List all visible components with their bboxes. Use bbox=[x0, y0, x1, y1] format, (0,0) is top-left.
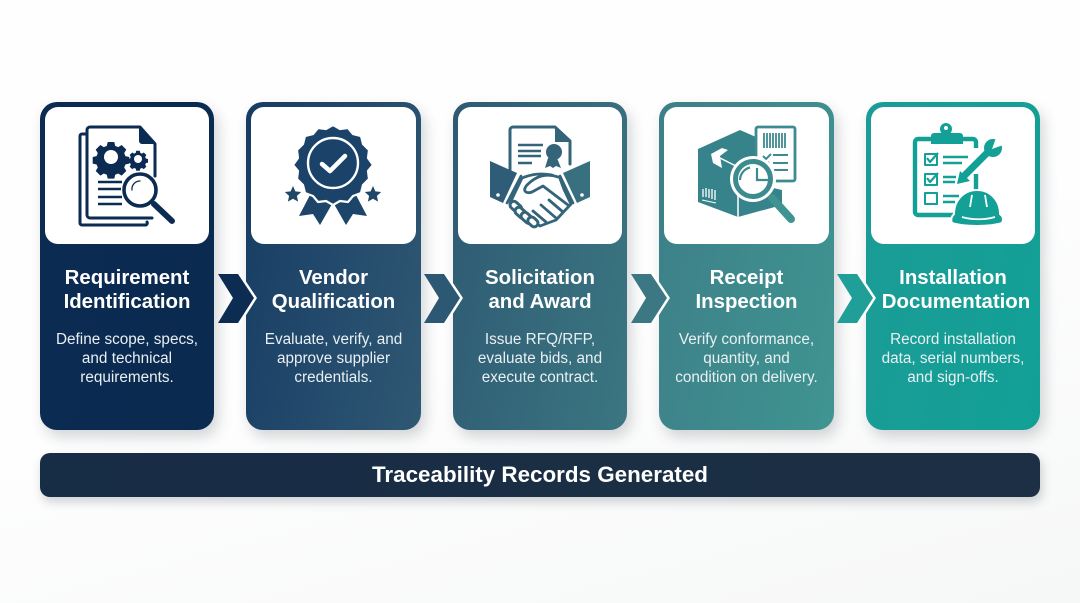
arrow: step 2 to 3 bbox=[424, 274, 460, 323]
description: Evaluate, verify, and bbox=[265, 331, 402, 348]
icon: award rosette with checkmark bbox=[285, 125, 381, 225]
arrow: step 4 to 5 bbox=[837, 274, 873, 323]
description: and technical bbox=[82, 350, 172, 367]
icon tile bbox=[45, 107, 209, 244]
heading: Vendor bbox=[299, 267, 368, 289]
heading bbox=[272, 267, 395, 313]
description: and sign-offs. bbox=[907, 369, 999, 386]
arrow: step 3 to 4 bbox=[631, 274, 667, 323]
icon tile bbox=[664, 107, 829, 244]
icon tile bbox=[871, 107, 1035, 244]
description bbox=[478, 331, 602, 386]
description: credentials. bbox=[294, 369, 373, 386]
description: approve supplier bbox=[277, 350, 390, 367]
description bbox=[675, 331, 818, 386]
description: evaluate bids, and bbox=[478, 350, 602, 367]
description: Issue RFQ/RFP, bbox=[485, 331, 595, 348]
icon: document with gears and magnifier bbox=[80, 127, 172, 225]
icon: contract and handshake bbox=[490, 127, 590, 228]
bottom banner bbox=[40, 453, 1040, 497]
heading: Identification bbox=[64, 291, 190, 313]
description bbox=[882, 331, 1024, 386]
heading bbox=[485, 267, 595, 313]
description: Define scope, specs, bbox=[56, 331, 198, 348]
description: Record installation bbox=[890, 331, 1016, 348]
panel: solicitation and award bbox=[453, 102, 627, 430]
heading bbox=[64, 267, 190, 313]
panel: vendor qualification bbox=[246, 102, 421, 430]
description: Verify conformance, bbox=[679, 331, 814, 348]
heading bbox=[696, 267, 797, 313]
icon: parcel, barcode label and magnifier bbox=[698, 127, 795, 219]
heading: Installation bbox=[899, 267, 1007, 289]
bottom banner: Traceability Records Generated bbox=[372, 462, 708, 487]
icon tile bbox=[251, 107, 416, 244]
description: requirements. bbox=[80, 369, 174, 386]
description: data, serial numbers, bbox=[882, 350, 1024, 367]
arrow: step 1 to 2 bbox=[218, 274, 254, 323]
heading: Qualification bbox=[272, 291, 395, 313]
description bbox=[56, 331, 198, 386]
heading: and Award bbox=[488, 291, 592, 313]
panel: installation documentation bbox=[866, 102, 1040, 430]
description: quantity, and bbox=[703, 350, 790, 367]
description bbox=[265, 331, 402, 386]
icon: clipboard, wrench and hard hat bbox=[915, 123, 1006, 226]
icon tile bbox=[458, 107, 622, 244]
panel: requirement identification bbox=[40, 102, 214, 430]
heading: Receipt bbox=[710, 267, 783, 289]
description: condition on delivery. bbox=[675, 369, 818, 386]
panel: receipt inspection bbox=[659, 102, 834, 430]
heading bbox=[882, 267, 1030, 313]
heading: Solicitation bbox=[485, 267, 595, 289]
heading: Requirement bbox=[65, 267, 189, 289]
heading: Documentation bbox=[882, 291, 1030, 313]
heading: Inspection bbox=[696, 291, 797, 313]
description: execute contract. bbox=[482, 369, 598, 386]
